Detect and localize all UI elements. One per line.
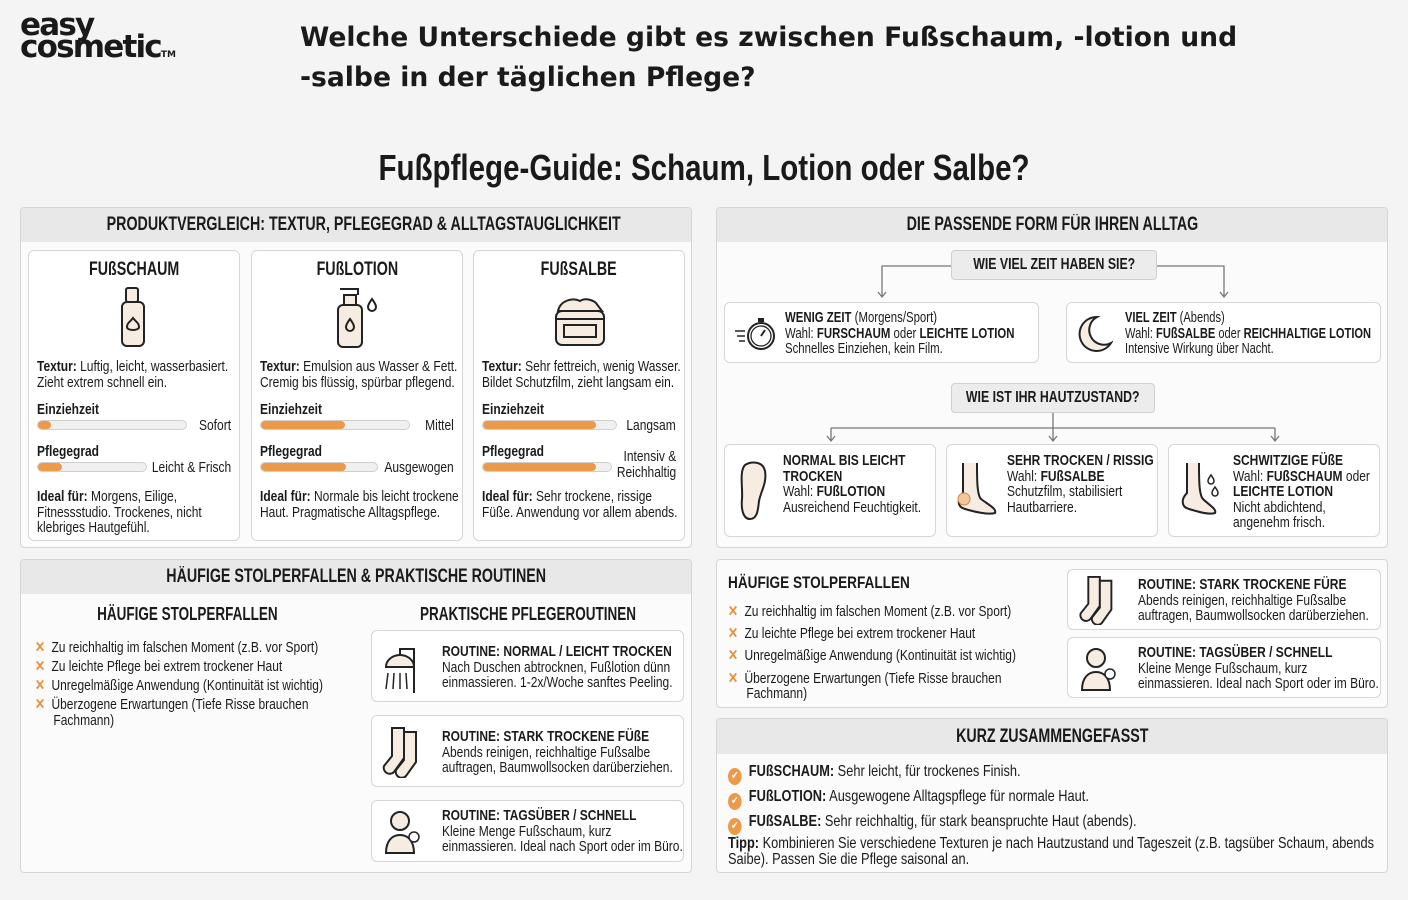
card: Fußsalbe: Reichhaltig bbox=[617, 464, 676, 480]
option: very dry: SEHR TROCKEN / RISSIG bbox=[1007, 452, 1154, 469]
card: Fußsalbe: Pflegegrad bbox=[482, 443, 544, 460]
card: Fußlotion: Textur: Emulsion aus Wasser & Fett. Cremig bis flüssig, spürbar pflegend. bbox=[260, 358, 457, 390]
option: much time: VIEL ZEIT (Abends) bbox=[1125, 309, 1225, 326]
routine card: normal bbox=[371, 630, 684, 702]
routine card: daytime right bbox=[1067, 637, 1381, 698]
option: normal: Wahl: FUßLOTION bbox=[783, 483, 885, 500]
panel: pitfalls right: HÄUFIGE STOLPERFALLEN bbox=[728, 573, 910, 592]
card: Fußschaum: Ideal für: Morgens, Eilige, Fitnessstudio. Trockenes, nicht klebriges Hautgefühl. bbox=[37, 488, 202, 536]
card: Fußschaum: Textur: Luftig, leicht, wasserbasiert. Zieht extrem schnell ein. bbox=[37, 358, 228, 390]
routine card: dry: ROUTINE: STARK TROCKENE FÜßE bbox=[442, 728, 649, 745]
card: Fußsalbe: Textur: Sehr fettreich, wenig Wasser. Bildet Schutzfilm, zieht langsam ein. bbox=[482, 358, 681, 390]
summary list: ✔ bbox=[731, 820, 738, 832]
panel: pitfalls and routines: HÄUFIGE STOLPERFALLEN & PRAKTISCHE ROUTINEN bbox=[166, 566, 546, 587]
pitfalls list: ✕ Unregelmäßige Anwendung (Kontinuität ist wichtig) bbox=[35, 677, 323, 694]
panel: product comparison: PRODUKTVERGLEICH: TEXTUR, PFLEGEGRAD & ALLTAGSTAUGLICHKEIT bbox=[107, 214, 621, 235]
icon: jar bbox=[555, 298, 605, 346]
title: Welche Unterschiede gibt es zwischen Fußschaum, -lotion und bbox=[300, 22, 1237, 53]
panel: pitfalls and routines bbox=[20, 559, 692, 873]
summary list: FUßSCHAUM: Sehr leicht, für trockenes Finish. bbox=[749, 763, 1021, 780]
option: very dry bbox=[946, 444, 1158, 537]
option: sweaty: Nicht abdichtend, angenehm frisch. bbox=[1233, 498, 1326, 531]
panel: product comparison bbox=[20, 207, 692, 548]
option: very dry: Wahl: FUßSALBE bbox=[1007, 468, 1105, 484]
panel: summary: KURZ ZUSAMMENGEFASST bbox=[956, 726, 1148, 747]
summary list: Tipp: Kombinieren Sie verschiedene Texturen je nach Hautzustand und Tageszeit (z.B. tagsüber Schaum, abends Saibe). Passen Sie die Pflege saisonal an. bbox=[728, 835, 1374, 868]
option: sweaty: Wahl: FUßSCHAUM oder LEICHTE LOTION bbox=[1233, 468, 1370, 500]
routine card: daytime right: ROUTINE: TAGSÜBER / SCHNELL bbox=[1138, 644, 1332, 661]
option: much time: Wahl: FUßSALBE oder REICHHALTIGE LOTION bbox=[1125, 324, 1371, 342]
summary list: ✔ bbox=[731, 770, 738, 782]
card: Fußlotion: Mittel bbox=[425, 417, 454, 434]
card: Fußlotion: FUßLOTION bbox=[316, 259, 398, 280]
subtitle: Fußpflege-Guide: Schaum, Lotion oder Salbe? bbox=[378, 147, 1030, 188]
panel: decision flow: DIE PASSENDE FORM FÜR IHREN ALLTAG bbox=[906, 214, 1198, 235]
summary list bbox=[728, 763, 1374, 868]
card: Fußlotion bbox=[251, 250, 463, 541]
logo bbox=[20, 7, 176, 65]
panel: pitfalls and routines: PRAKTISCHE PFLEGEROUTINEN bbox=[420, 604, 637, 624]
card: Fußlotion: Ausgewogen bbox=[385, 459, 454, 476]
routine card: daytime right: Kleine Menge Fußschaum, kurz bbox=[1138, 660, 1307, 676]
option: sweaty: SCHWITZIGE FÜßE bbox=[1233, 452, 1343, 469]
card: Fußsalbe: Ideal für: Sehr trockene, rissige Füße. Anwendung vor allem abends. bbox=[482, 488, 677, 520]
routine card: daytime: ROUTINE: TAGSÜBER / SCHNELL bbox=[442, 807, 636, 824]
option: little time: Wahl: FURSCHAUM oder LEICHTE LOTION bbox=[785, 324, 1015, 342]
card: Fußschaum: Sofort bbox=[199, 417, 231, 434]
pitfalls list bbox=[35, 639, 323, 729]
question: time bbox=[951, 250, 1157, 280]
option: little time bbox=[724, 302, 1039, 363]
routine card: dry right: Abends reinigen, reichhaltige Fußsalbe bbox=[1138, 592, 1346, 608]
routine card: normal: einmassieren. 1-2x/Woche sanftes Peeling. bbox=[442, 674, 673, 691]
pitfalls list: ✕ Überzogene Erwartungen (Tiefe Risse brauchen Fachmann) bbox=[35, 696, 309, 729]
card: Fußsalbe: Langsam bbox=[627, 417, 676, 434]
card: Fußschaum: Einziehzeit bbox=[37, 401, 99, 418]
icon: foam bottle bbox=[121, 287, 145, 347]
routine card: dry: auftragen, Baumwollsocken darüberziehen. bbox=[442, 759, 673, 776]
summary list: FUßLOTION: Ausgewogene Alltagspflege für normale Haut. bbox=[749, 788, 1089, 805]
card: Fußlotion: Pflegegrad bbox=[260, 443, 322, 460]
summary list: ✔ bbox=[731, 795, 738, 807]
pitfalls list right: ✕ Unregelmäßige Anwendung (Kontinuität ist wichtig) bbox=[728, 647, 1016, 664]
card: Fußschaum: Pflegegrad bbox=[37, 443, 99, 460]
card: Fußsalbe bbox=[473, 250, 685, 541]
routine card: normal: Nach Duschen abtrocknen, Fußlotion dünn bbox=[442, 658, 670, 676]
option: very dry: Schutzfilm, stabilisiert Hautbarriere. bbox=[1007, 483, 1122, 516]
routine card: daytime bbox=[371, 800, 684, 862]
card: Fußsalbe: FUßSALBE bbox=[541, 259, 617, 280]
routine card: dry bbox=[371, 715, 684, 787]
option: much time: Intensive Wirkung über Nacht. bbox=[1125, 340, 1274, 357]
card: Fußlotion: Einziehzeit bbox=[260, 401, 322, 418]
summary list: FUßSALBE: Sehr reichhaltig, für stark beanspruchte Haut (abends). bbox=[749, 813, 1137, 830]
routine card: dry right: ROUTINE: STARK TROCKENE FÜRE bbox=[1138, 576, 1346, 593]
routine card: dry: Abends reinigen, reichhaltige Fußsalbe bbox=[442, 744, 650, 760]
pitfalls list right bbox=[728, 603, 1016, 702]
card: Fußlotion: Ideal für: Normale bis leicht trockene Haut. Pragmatische Alltagspflege. bbox=[260, 488, 459, 520]
card: Fußsalbe: Einziehzeit bbox=[482, 401, 544, 418]
routine card: daytime right: einmassieren. Ideal nach Sport oder im Büro. bbox=[1138, 675, 1379, 692]
routine card: daytime: Kleine Menge Fußschaum, kurz bbox=[442, 822, 611, 840]
option: little time: Schnelles Einziehen, kein Film. bbox=[785, 340, 943, 357]
panel: decision flow bbox=[716, 207, 1388, 548]
routine card: dry right: auftragen, Baumwollsocken darüberziehen. bbox=[1138, 607, 1369, 624]
routine card: normal: ROUTINE: NORMAL / LEICHT TROCKEN bbox=[442, 643, 672, 660]
title: -salbe in der täglichen Pflege? bbox=[300, 62, 756, 93]
panel: summary bbox=[716, 718, 1388, 873]
question: time: WIE VIEL ZEIT HABEN SIE? bbox=[973, 256, 1135, 273]
routine card: dry right bbox=[1067, 569, 1381, 630]
pitfalls list right: ✕ Zu leichte Pflege bei extrem trockener Haut bbox=[728, 625, 975, 642]
title bbox=[300, 22, 1237, 93]
option: normal: NORMAL BIS LEICHT TROCKEN bbox=[783, 452, 905, 484]
card: Fußschaum: FUßSCHAUM bbox=[89, 259, 179, 280]
option: normal: Ausreichend Feuchtigkeit. bbox=[783, 498, 921, 516]
option: little time: WENIG ZEIT (Morgens/Sport) bbox=[785, 309, 937, 326]
panel: pitfalls right bbox=[716, 559, 1388, 708]
arrows: flow connectors bbox=[826, 265, 1280, 442]
option: much time bbox=[1066, 302, 1381, 363]
option: normal bbox=[724, 444, 936, 537]
question: skin bbox=[951, 383, 1155, 413]
logo: cosmeticTM bbox=[20, 29, 176, 65]
panel: pitfalls and routines: HÄUFIGE STOLPERFALLEN bbox=[97, 604, 277, 624]
pitfalls list: ✕ Zu reichhaltig im falschen Moment (z.B. vor Sport) bbox=[35, 639, 318, 656]
option: sweaty bbox=[1168, 444, 1380, 537]
logo: easy bbox=[20, 7, 93, 43]
routine card: daytime: einmassieren. Ideal nach Sport oder im Büro. bbox=[442, 838, 683, 855]
pitfalls list: ✕ Zu leichte Pflege bei extrem trockener Haut bbox=[35, 658, 282, 675]
card: Fußschaum: Leicht & Frisch bbox=[152, 459, 231, 476]
pitfalls list right: ✕ Zu reichhaltig im falschen Moment (z.B. vor Sport) bbox=[728, 603, 1011, 620]
card: Fußsalbe: Intensiv & bbox=[623, 448, 676, 465]
icon: lotion pump bbox=[337, 288, 377, 348]
card: Fußschaum bbox=[28, 250, 240, 541]
question: skin: WIE IST IHR HAUTZUSTAND? bbox=[966, 389, 1140, 406]
pitfalls list right: ✕ Überzogene Erwartungen (Tiefe Risse brauchen Fachmann) bbox=[728, 670, 1002, 702]
